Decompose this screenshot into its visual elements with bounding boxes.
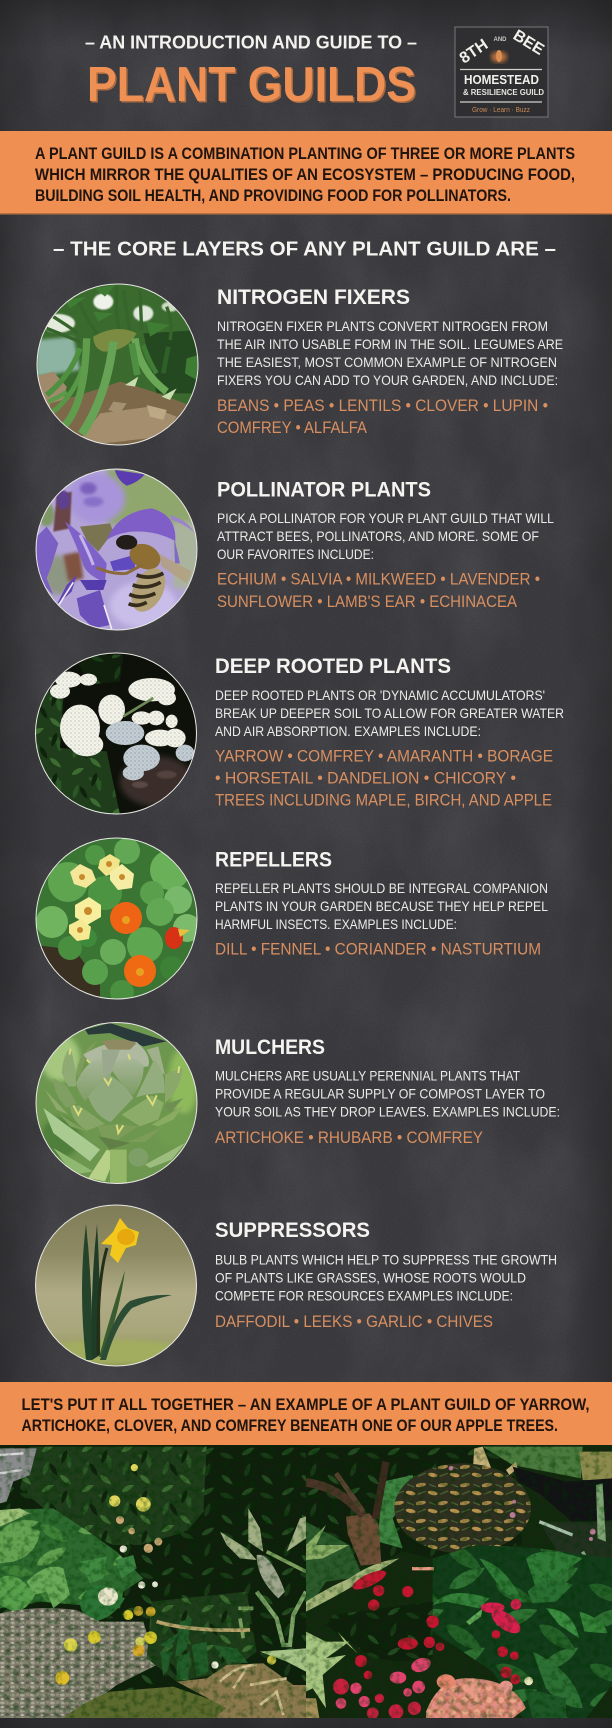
panel: nitrogen fixers xyxy=(35,283,563,447)
logo: 8th and bee homestead: & RESILIENCE GUILD xyxy=(463,88,544,97)
panel: suppressors: SUPPRESSORS xyxy=(215,1219,370,1242)
panel: suppressors: DAFFODIL • LEEKS • GARLIC • CHIVES xyxy=(215,1312,493,1331)
logo: 8th and bee homestead: HOMESTEAD xyxy=(464,72,539,87)
heading: core layers: – THE CORE LAYERS OF ANY PLANT GUILD ARE – xyxy=(53,238,556,260)
panel: pollinator plants xyxy=(35,468,554,632)
panel: mulchers: YOUR SOIL AS THEY DROP LEAVES. EXAMPLES INCLUDE: xyxy=(215,1104,560,1120)
panel: pollinator plants: PICK A POLLINATOR FOR YOUR PLANT GUILD THAT WILL xyxy=(217,510,554,526)
intro band xyxy=(0,131,612,214)
closing band xyxy=(0,1382,612,1445)
panel: repellers xyxy=(36,838,548,1004)
panel: pollinator plants: POLLINATOR PLANTS xyxy=(217,478,431,502)
subtitle: an introduction and guide to: – AN INTRODUCTION AND GUIDE TO – xyxy=(85,32,417,52)
panel: suppressors xyxy=(35,1205,557,1366)
photo: daffodil xyxy=(35,1205,196,1366)
panel: nitrogen fixers: THE AIR INTO USABLE FORM IN THE SOIL. LEGUMES ARE xyxy=(217,336,563,352)
panel: nitrogen fixers: NITROGEN FIXER PLANTS CONVERT NITROGEN FROM xyxy=(217,318,548,334)
panel: deep rooted plants: DEEP ROOTED PLANTS xyxy=(215,655,451,678)
panel: nitrogen fixers: BEANS • PEAS • LENTILS • CLOVER • LUPIN • xyxy=(217,396,548,415)
panel: repellers: HARMFUL INSECTS. EXAMPLES INCLUDE: xyxy=(215,916,457,932)
header xyxy=(85,32,418,114)
intro band: BUILDING SOIL HEALTH, AND PROVIDING FOOD FOR POLLINATORS. xyxy=(35,186,511,205)
panel: nitrogen fixers: THE EASIEST, MOST COMMON EXAMPLE OF NITROGEN xyxy=(217,354,557,370)
logo: 8th and bee homestead xyxy=(455,27,548,117)
panel: deep rooted plants: YARROW • COMFREY • AMARANTH • BORAGE xyxy=(215,746,553,766)
panel: mulchers: ARTICHOKE • RHUBARB • COMFREY xyxy=(215,1128,483,1147)
panel: nitrogen fixers: COMFREY • ALFALFA xyxy=(217,418,368,437)
logo: 8th and bee homestead: AND xyxy=(494,37,507,43)
logo: 8th and bee homestead: BEE xyxy=(510,27,547,59)
panel: pollinator plants: OUR FAVORITES INCLUDE: xyxy=(217,546,374,562)
panel: suppressors: OF PLANTS LIKE GRASSES, WHOSE ROOTS WOULD xyxy=(215,1270,526,1286)
panel: suppressors: COMPETE FOR RESOURCES EXAMPLES INCLUDE: xyxy=(215,1288,513,1304)
photo: artichoke xyxy=(35,1021,200,1185)
photo: bee on purple flower xyxy=(35,468,200,632)
photo: white yarrow xyxy=(35,651,200,815)
title: plant guilds: PLANT GUILDS xyxy=(87,58,416,112)
panel: repellers: REPELLERS xyxy=(215,848,332,872)
panel: pollinator plants: SUNFLOWER • LAMB'S EAR • ECHINACEA xyxy=(217,592,518,611)
panel: pollinator plants: ECHIUM • SALVIA • MILKWEED • LAVENDER • xyxy=(217,570,540,588)
photo: plant guild garden xyxy=(0,1445,612,1719)
panel: nitrogen fixers: NITROGEN FIXERS xyxy=(217,286,410,309)
panel: deep rooted plants: AND AIR ABSORPTION. EXAMPLES INCLUDE: xyxy=(215,723,481,739)
panel: mulchers: PROVIDE A REGULAR SUPPLY OF COMPOST LAYER TO xyxy=(215,1086,545,1102)
panel: mulchers: MULCHERS xyxy=(215,1036,325,1059)
panel: deep rooted plants: BREAK UP DEEPER SOIL TO ALLOW FOR GREATER WATER xyxy=(215,705,564,721)
logo: 8th and bee homestead: 8TH xyxy=(457,36,491,67)
panel: repellers: PLANTS IN YOUR GARDEN BECAUSE THEY HELP REPEL xyxy=(215,898,548,914)
photo: green beans xyxy=(35,283,200,447)
panel: deep rooted plants xyxy=(35,651,564,815)
panel: repellers: REPELLER PLANTS SHOULD BE INTEGRAL COMPANION xyxy=(215,880,548,896)
panel: deep rooted plants: TREES INCLUDING MAPLE, BIRCH, AND APPLE xyxy=(215,790,552,810)
panel: deep rooted plants: DEEP ROOTED PLANTS OR 'DYNAMIC ACCUMULATORS' xyxy=(215,687,545,703)
title: plant guilds: PLANT GUILDS xyxy=(88,60,418,114)
panel: suppressors: BULB PLANTS WHICH HELP TO SUPPRESS THE GROWTH xyxy=(215,1252,557,1268)
panel: nitrogen fixers: FIXERS YOU CAN ADD TO YOUR GARDEN, AND INCLUDE: xyxy=(217,372,558,388)
panel: pollinator plants: ATTRACT BEES, POLLINATORS, AND MORE. SOME OF xyxy=(217,528,539,544)
photo: nasturtium xyxy=(36,838,201,1004)
panel: deep rooted plants: • HORSETAIL • DANDELION • CHICORY • xyxy=(215,768,516,788)
logo: 8th and bee homestead: Grow · Learn · Buzz xyxy=(472,107,530,114)
panel: mulchers: MULCHERS ARE USUALLY PERENNIAL PLANTS THAT xyxy=(215,1068,520,1084)
panel: mulchers xyxy=(35,1021,560,1185)
panel: repellers: DILL • FENNEL • CORIANDER • NASTURTIUM xyxy=(215,940,541,958)
